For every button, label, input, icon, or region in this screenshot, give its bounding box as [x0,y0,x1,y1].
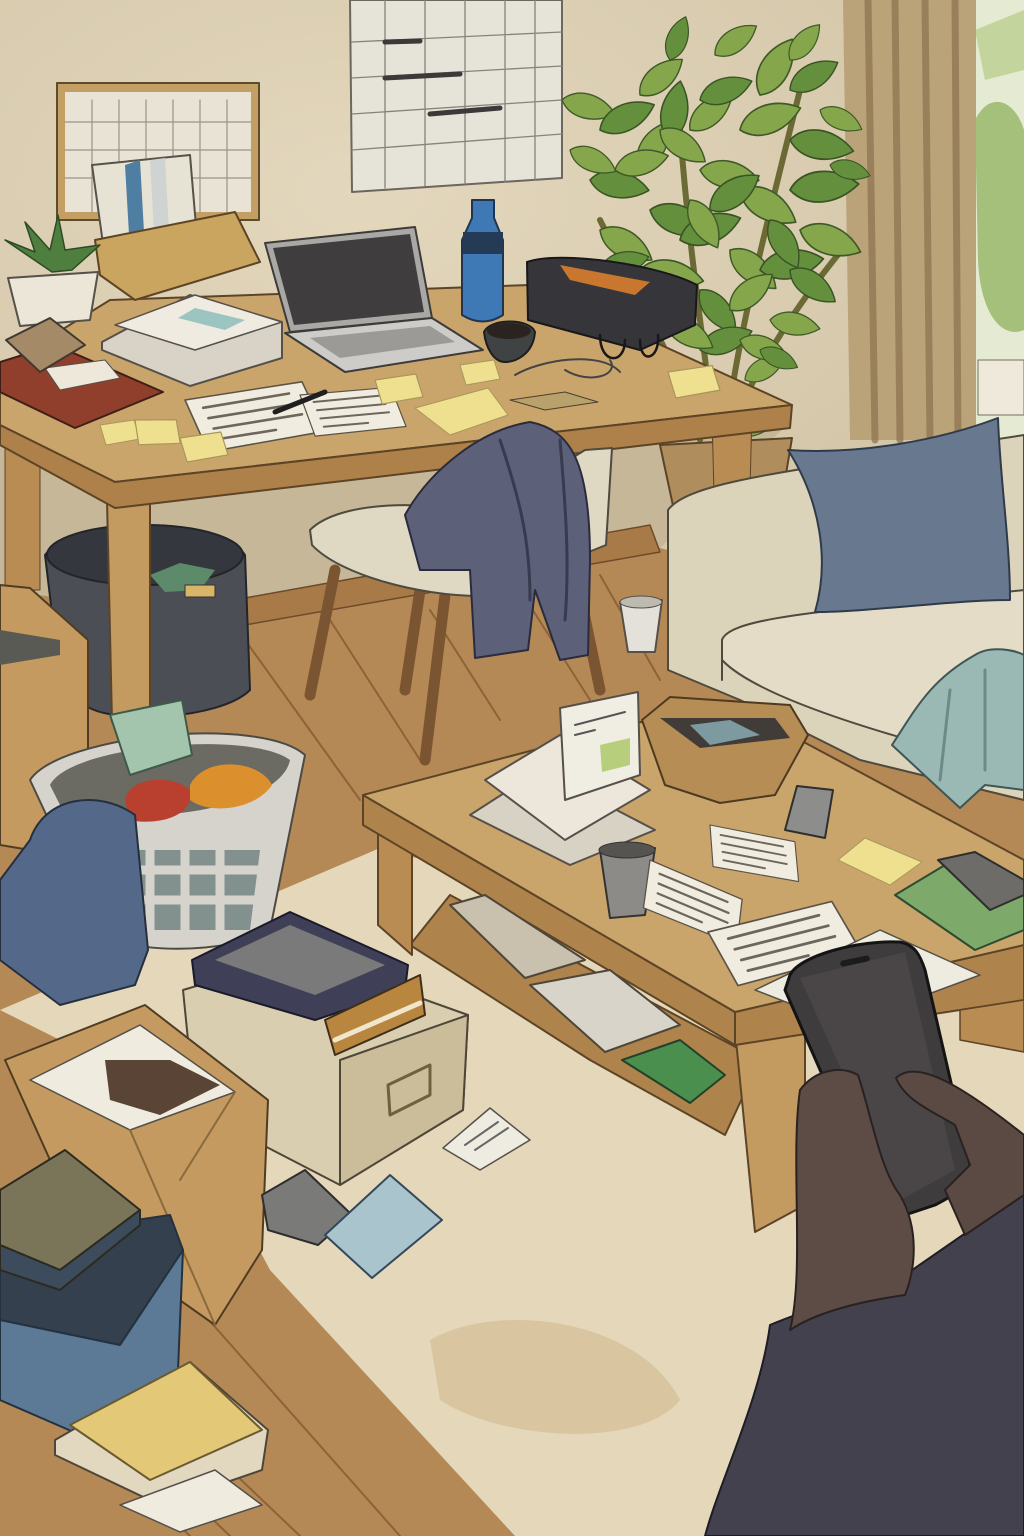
front apron [363,795,735,1045]
bowl [484,322,535,362]
yellow book stack on floor [55,1362,268,1532]
far right table leg [960,1000,1024,1052]
person sleeve [705,1190,1024,1536]
paper stack on desk [102,295,282,386]
file organiser [92,155,260,300]
receipt [443,1108,530,1170]
shadow under desk [0,420,792,622]
green books on table [895,852,1024,950]
right apron [735,945,1024,1045]
chair [310,448,612,760]
black bag [527,258,697,358]
chair legs [310,570,600,760]
rug stains [430,1320,680,1434]
open booklet and stack [470,692,655,865]
desk edge [0,405,792,508]
desk top [0,285,792,482]
front hand [790,1070,914,1330]
trash bin [45,525,250,717]
window [972,0,1024,440]
curtain [843,0,976,440]
books on box [325,975,425,1055]
table shelf [410,895,760,1135]
kraft paper bag [5,1005,268,1325]
laundry basket [30,700,305,949]
wood floor [0,548,1024,1536]
blue cloth over basket [0,800,148,1005]
remote [785,786,833,838]
beige storage box [183,955,468,1185]
table top [363,722,1024,1012]
desk left leg [107,495,150,722]
desk back leg [5,435,40,590]
dark tray [192,912,408,1020]
pillow [788,418,1010,612]
phone [785,942,970,1215]
draped jacket on chair [405,422,590,660]
books in bin [0,1150,140,1290]
desk papers [100,359,720,462]
table back leg [378,820,412,955]
large house plant [559,13,872,440]
table front leg [735,1025,805,1232]
red book [0,318,163,428]
back hand fingers [896,1072,1024,1235]
plant pot [660,438,792,515]
desk right leg [712,410,752,495]
laptop [265,227,483,372]
water bottle [462,200,503,322]
blue bin [0,1215,183,1450]
baseboard [245,525,660,625]
shelf books [450,895,725,1103]
wall calendar left [57,83,259,220]
paper cup on floor [620,596,662,652]
rug [0,848,1024,1536]
table documents [627,813,980,1025]
wall [0,0,1024,640]
small potted plant [5,215,100,326]
cardboard tray [642,697,808,803]
chair back and seat [310,448,612,596]
paper bag left edge [0,585,88,850]
teal throw blanket [892,649,1024,808]
plant stems [600,90,850,440]
table cup [599,842,655,918]
wall calendar top [350,0,562,192]
small clutter by box [262,1170,442,1278]
coffee table [363,722,1024,1232]
sofa [668,435,1024,800]
desk [0,285,792,722]
